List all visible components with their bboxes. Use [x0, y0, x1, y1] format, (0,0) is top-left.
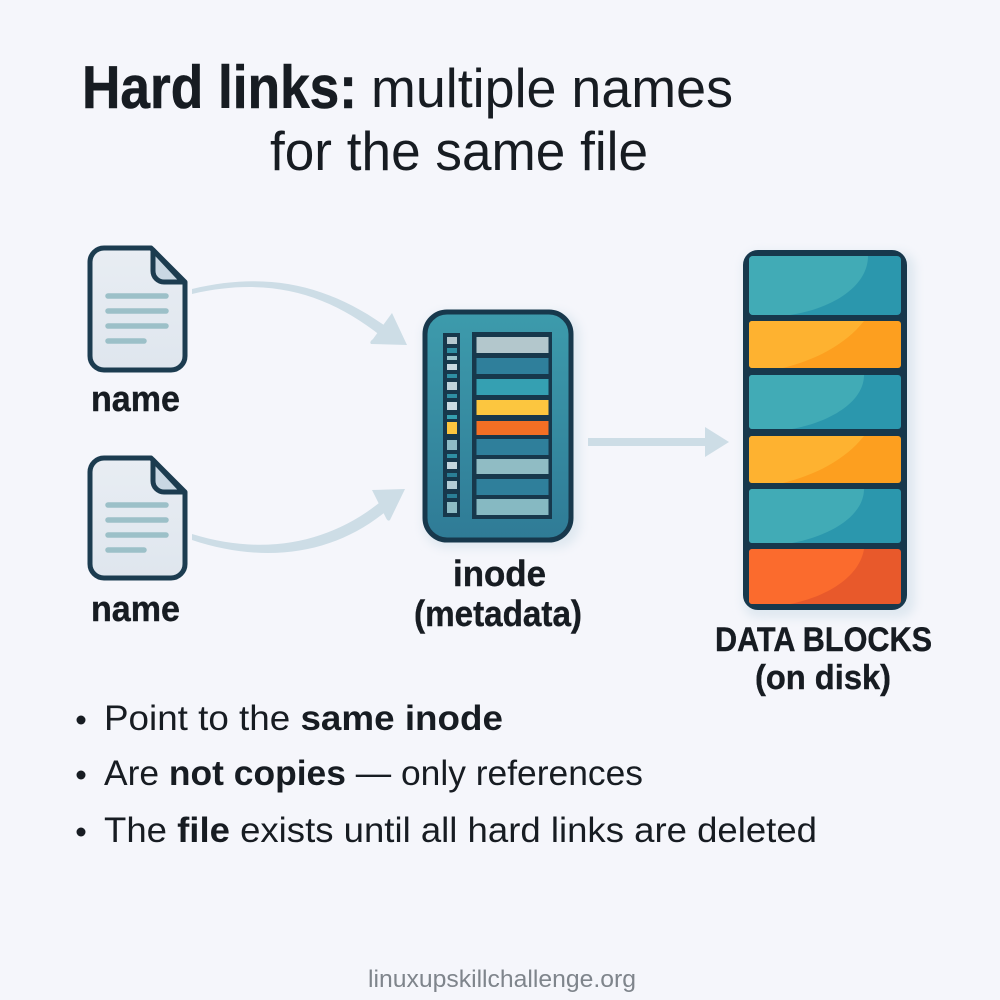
title: multiple names	[371, 57, 733, 119]
label: data blocks: DATA BLOCKS	[715, 621, 932, 659]
label: inode	[414, 553, 582, 634]
icon: file name 1	[90, 248, 185, 370]
icon: data blocks	[745, 252, 905, 608]
label: data blocks	[715, 621, 932, 697]
bullet 2: Are not copies — only references	[104, 754, 643, 793]
arrow: inode to data blocks	[588, 427, 729, 457]
label: inode: inode	[453, 553, 546, 594]
icon: file name 2	[90, 458, 185, 578]
arrow: name 1 to inode	[192, 281, 407, 345]
block 5	[749, 489, 901, 543]
bullet list	[76, 699, 817, 850]
arrow: name 2 to inode	[192, 489, 405, 553]
label: data blocks: (on disk)	[755, 659, 891, 697]
block 1	[749, 256, 901, 315]
label: name 2: name	[91, 588, 180, 629]
block 2	[749, 321, 901, 368]
title: for the same file	[270, 120, 648, 182]
block 4	[749, 436, 901, 483]
label: inode: (metadata)	[414, 593, 582, 634]
footer url: linuxupskillchallenge.org	[368, 966, 636, 993]
block 6	[749, 549, 901, 604]
inode index column	[443, 333, 460, 517]
label: name 1: name	[91, 378, 180, 419]
title: Hard links:	[82, 54, 357, 121]
inode metadata rows	[472, 332, 552, 519]
bullet 3: The file exists until all hard links are deleted	[104, 811, 817, 850]
title	[82, 54, 733, 182]
block 3	[749, 375, 901, 429]
bullet 1: Point to the same inode	[104, 699, 503, 738]
icon: inode	[425, 312, 571, 540]
